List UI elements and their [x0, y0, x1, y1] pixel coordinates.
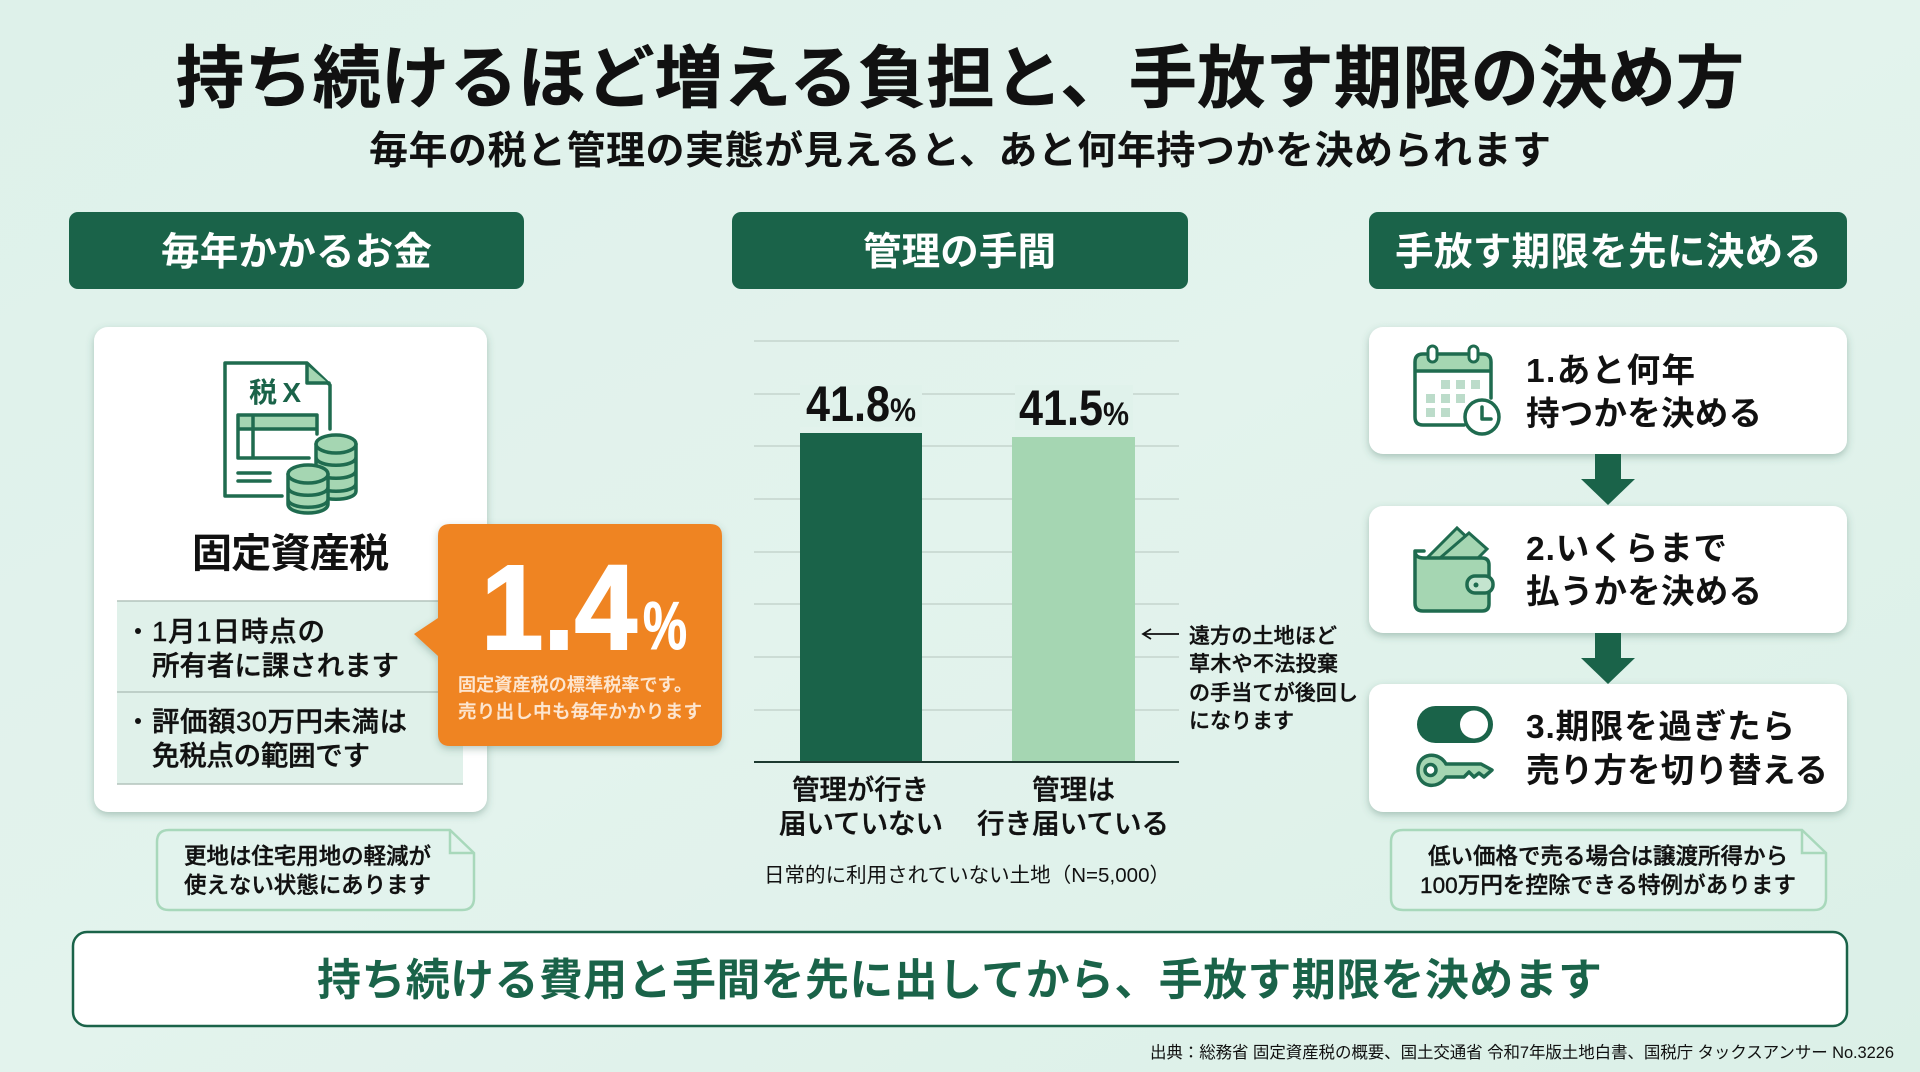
note: low-price sale exemption: 100万円を控除できる特例があります [1420, 873, 1796, 898]
category label: managed [977, 774, 1169, 839]
category label: not managed [779, 774, 943, 839]
value: 41.5%: % [1103, 396, 1129, 432]
icon: tax document and coins: 税X [249, 377, 301, 408]
category label: not managed: 管理が行き [792, 774, 929, 805]
step 1 text: 1.あと何年 [1526, 353, 1695, 390]
callout: 1.4% tax rate: 固定資産税の標準税率です。 [458, 675, 692, 695]
note: low-price sale exemption [1391, 830, 1826, 910]
chart caption: 日常的に利用されていない土地（N=5,000） [764, 864, 1170, 887]
step card 2 [1369, 506, 1847, 633]
heading: set deadline first [1369, 212, 1847, 289]
icon: key [1418, 755, 1492, 785]
conclusion banner: 持ち続ける費用と手間を先に出してから、手放す期限を決めます [317, 956, 1602, 1005]
note: vacant land: 更地は住宅用地の軽減が [184, 844, 431, 869]
title: 持ち続けるほど増える負担と、手放す期限の決め方 [176, 41, 1744, 117]
note: vacant land [157, 830, 474, 910]
callout: 1.4% tax rate: 売り出し中も毎年かかります [458, 701, 702, 722]
step 1 text [1526, 353, 1762, 433]
table: tax facts: 評価額30万円未満は [152, 706, 407, 737]
annotation: remote land: になります [1189, 710, 1294, 733]
heading: management effort: 管理の手間 [863, 231, 1056, 274]
category label: managed: 行き届いている [977, 808, 1169, 839]
callout: 1.4% tax rate [414, 524, 722, 746]
step 2 text: 2.いくらまで [1526, 531, 1727, 568]
step card 3 [1369, 684, 1847, 812]
step 3 text: 3.期限を過ぎたら [1526, 709, 1795, 746]
icon: calendar with clock [1415, 346, 1499, 434]
step 2 text: 払うかを決める [1526, 574, 1762, 611]
heading: set deadline first: 手放す期限を先に決める [1395, 231, 1822, 274]
step 2 text [1526, 531, 1762, 611]
value: 41.5%: 41.5 [1019, 380, 1103, 436]
icon: tax document and coins [225, 363, 356, 513]
annotation: remote land: の手当てが後回し [1189, 682, 1358, 705]
step 3 text: 売り方を切り替える [1526, 753, 1828, 790]
callout: 1.4% tax rate: % [643, 588, 687, 664]
heading: yearly costs [69, 212, 524, 289]
conclusion banner [73, 932, 1847, 1026]
heading: fixed asset tax: 固定資産税 [192, 532, 389, 576]
arrow: step 2 to 3 [1581, 633, 1635, 684]
source: 出典：総務省 固定資産税の概要、国土交通省 令和7年版土地白書、国税庁 タックスアンサー No.3226 [1150, 1043, 1894, 1062]
icon: toggle switch [1417, 706, 1493, 743]
table: tax facts [117, 601, 463, 784]
category label: not managed: 届いていない [779, 808, 943, 839]
table: tax facts: 1月1日時点の [152, 616, 325, 647]
step card 1 [1369, 327, 1847, 454]
callout: 1.4% tax rate: 1.4 [481, 539, 637, 675]
annotation: remote land: 草木や不法投棄 [1189, 653, 1338, 676]
table: tax facts: 免税点の範囲です [152, 740, 370, 771]
note: low-price sale exemption: 低い価格で売る場合は譲渡所得から [1428, 844, 1788, 869]
heading: yearly costs: 毎年かかるお金 [161, 231, 432, 274]
arrow: step 1 to 2 [1581, 454, 1635, 505]
bar chart: management status [754, 341, 1179, 887]
icon: wallet [1415, 528, 1493, 611]
category label: managed: 管理は [1032, 774, 1115, 805]
annotation: remote land [1143, 625, 1358, 733]
value: 41.8%: 41.8 [806, 376, 890, 432]
step 3 text [1526, 709, 1828, 790]
note: vacant land: 使えない状態にあります [184, 873, 431, 898]
bar: managed [1012, 437, 1135, 762]
step 1 text: 持つかを決める [1526, 396, 1762, 433]
annotation: remote land: 遠方の土地ほど [1189, 625, 1337, 648]
subtitle: 毎年の税と管理の実態が見えると、あと何年持つかを決められます [369, 130, 1551, 173]
value: 41.8%: % [890, 392, 916, 428]
bar: not managed [800, 433, 922, 762]
table: tax facts: 所有者に課されます [152, 650, 399, 681]
heading: management effort [732, 212, 1188, 289]
panel: fixed asset tax card [94, 327, 487, 812]
